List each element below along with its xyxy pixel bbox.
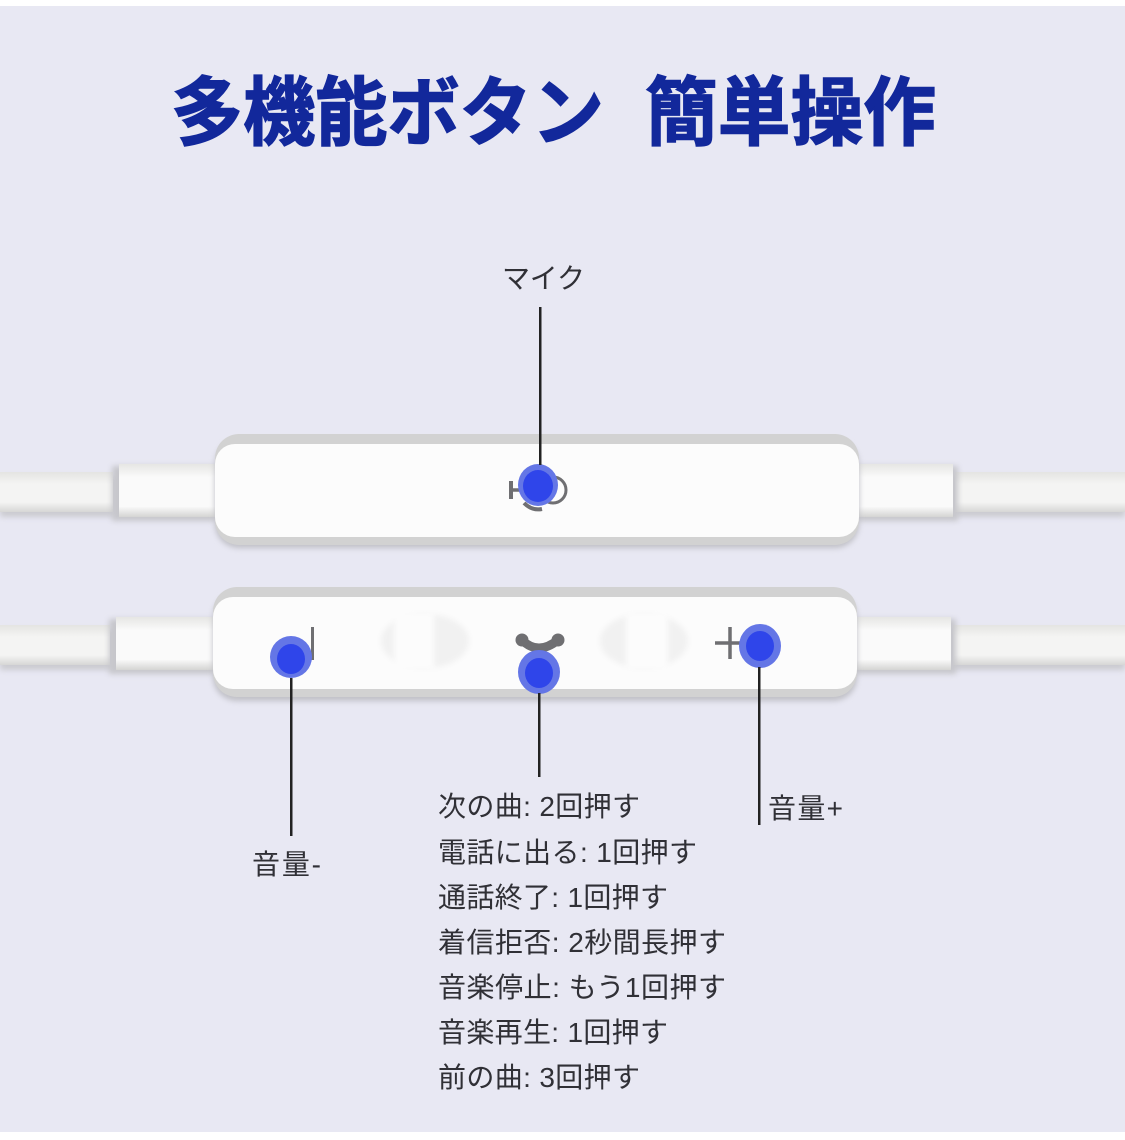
- leader line: call: [538, 693, 540, 777]
- leader line: microphone: [539, 307, 542, 465]
- button marker: volume plus: [739, 624, 781, 668]
- title: 簡単操作: [645, 71, 936, 155]
- upper remote: [0, 434, 1125, 548]
- button instructions: 前の曲: 3回押す: [438, 1062, 640, 1093]
- title: [171, 71, 936, 155]
- icon: volume plus: [715, 627, 748, 659]
- label: microphone: マイク: [502, 263, 585, 294]
- lower remote: [0, 587, 1125, 701]
- left cable: [0, 464, 220, 521]
- icon: microphone: [511, 477, 566, 509]
- label: volume minus: 音量-: [252, 849, 321, 880]
- button instructions: 着信拒否: 2秒間長押す: [438, 927, 726, 958]
- right cable: [848, 617, 1125, 674]
- button instructions: 次の曲: 2回押す: [438, 791, 640, 822]
- button marker: call: [518, 650, 560, 694]
- button instructions: 通話終了: 1回押す: [438, 882, 668, 913]
- remote body: [213, 587, 857, 701]
- right cable: [850, 464, 1125, 521]
- icon: call button: [516, 634, 564, 648]
- remote body: [215, 434, 859, 548]
- recess right: [600, 612, 688, 670]
- leader line: volume plus: [758, 667, 760, 825]
- icon: volume minus: [311, 627, 314, 660]
- left cable: [0, 617, 217, 674]
- recess left: [381, 612, 469, 670]
- leader line: volume minus: [290, 678, 292, 836]
- button instructions: 電話に出る: 1回押す: [438, 837, 697, 868]
- title: 多機能ボタン: [171, 71, 604, 155]
- button marker: microphone: [518, 464, 558, 506]
- button instructions: [438, 791, 726, 1093]
- label: volume plus: 音量+: [768, 793, 843, 824]
- button instructions: 音楽再生: 1回押す: [438, 1017, 668, 1048]
- button instructions: 音楽停止: もう1回押す: [438, 972, 726, 1003]
- button marker: volume minus: [270, 636, 312, 678]
